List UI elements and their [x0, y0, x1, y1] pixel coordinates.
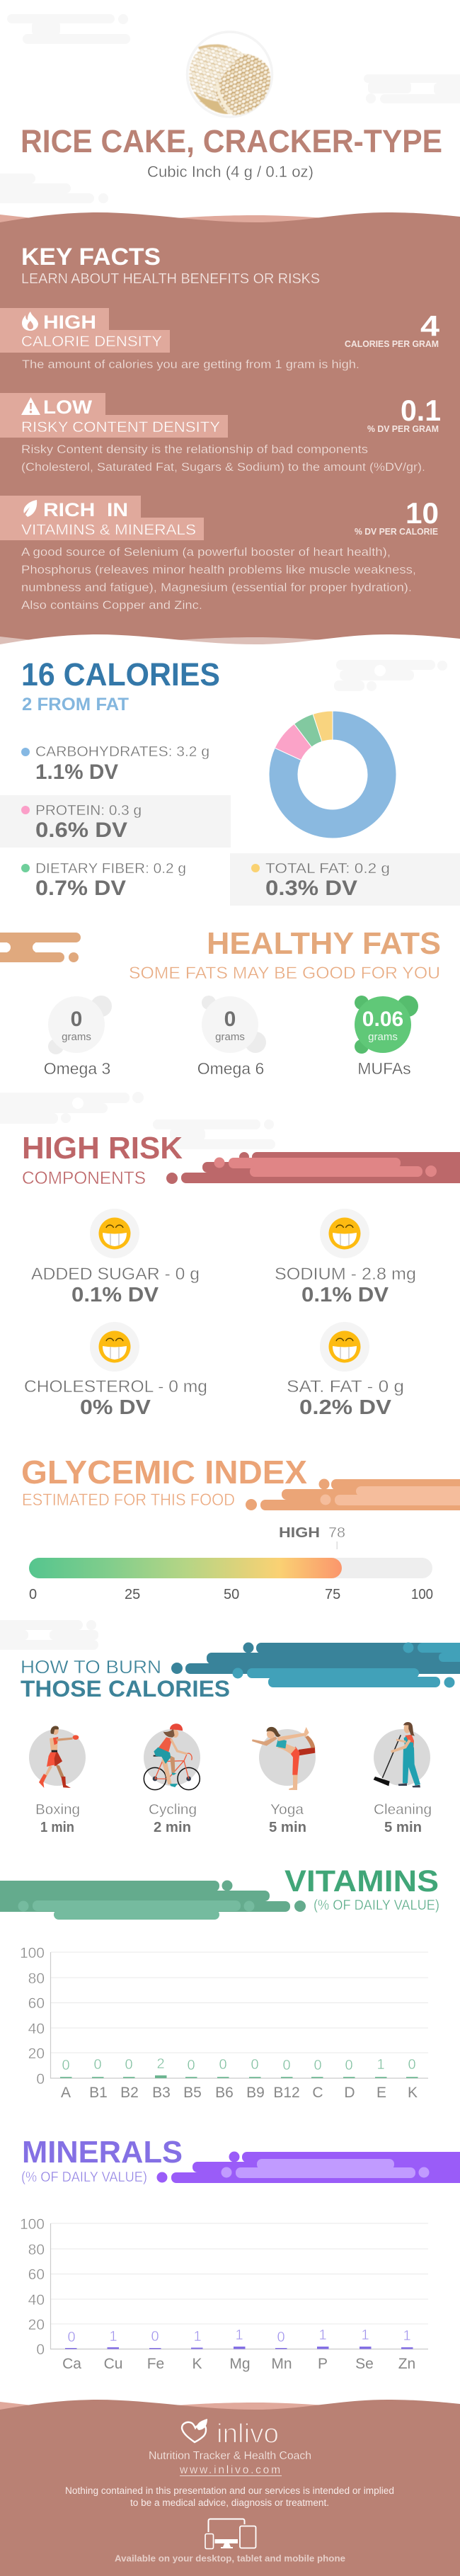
- website link: www.inlivo.com: [179, 2464, 280, 2476]
- omega 3: Omega 3: [44, 1059, 110, 1078]
- bar chart: vitamins: B6: [215, 2085, 234, 2101]
- bar chart: minerals: 0: [67, 2330, 76, 2345]
- marker label: high 78: HIGH: [279, 1525, 320, 1541]
- bar chart: vitamins: 1: [376, 2057, 385, 2073]
- bar chart: vitamins: 100: [20, 1945, 45, 1961]
- omega 3: grams: [62, 1031, 91, 1043]
- omega 6: Omega 6: [197, 1059, 264, 1078]
- subheading: percent daily value: (% OF DAILY VALUE): [314, 1898, 439, 1913]
- bar chart: minerals: P: [318, 2356, 328, 2372]
- mufas: MUFAs: [357, 1059, 411, 1078]
- bar chart: vitamins: B5: [183, 2085, 202, 2101]
- bar chart: vitamins: 20: [28, 2046, 45, 2062]
- gauge scale: 50: [224, 1587, 239, 1602]
- bar chart: vitamins: 0: [282, 2058, 291, 2073]
- icon: grinning face: [328, 1331, 361, 1362]
- fact: high calorie density: 4: [420, 309, 439, 342]
- activity: yoga: 5 min: [269, 1820, 306, 1835]
- background clouds: header: [0, 14, 460, 203]
- item: sodium: SODIUM - 2.8 mg: [275, 1265, 416, 1284]
- gauge bar: [29, 1558, 432, 1578]
- icon: warning triangle: [21, 397, 40, 415]
- omega 6: [197, 996, 266, 1078]
- activity: boxing: [29, 1726, 86, 1835]
- panel: high risk components: [0, 1092, 460, 1419]
- legend: total fat: 0.3% DV: [265, 877, 357, 900]
- subheading: key facts: LEARN ABOUT HEALTH BENEFITS OR RISKS: [21, 271, 320, 287]
- gauge scale: 0: [29, 1587, 37, 1602]
- fact: rich in vitamins and minerals: [0, 496, 439, 612]
- marker label: high 78: 78: [328, 1525, 345, 1541]
- bar chart: vitamins: C: [312, 2085, 323, 2101]
- bar chart: minerals: 1: [193, 2329, 202, 2344]
- bar chart: vitamins: 0: [345, 2058, 353, 2073]
- bar chart: vitamins: A: [61, 2085, 71, 2101]
- icon: yoga pose: [252, 1727, 315, 1790]
- bar chart: vitamins: B9: [246, 2085, 265, 2101]
- item: added sugar: 0.1% DV: [71, 1284, 159, 1306]
- bar chart: minerals: K: [192, 2356, 202, 2372]
- bar chart: minerals: 100: [20, 2216, 45, 2233]
- disclaimer: [65, 2485, 394, 2508]
- item: saturated fat: SAT. FAT - 0 g: [287, 1377, 404, 1396]
- omega 6: grams: [215, 1031, 245, 1043]
- icon: devices: [205, 2519, 256, 2549]
- subheading: percent daily value: (% OF DAILY VALUE): [21, 2170, 147, 2185]
- bar chart: vitamins: 0: [187, 2058, 195, 2073]
- mufas: 0.06: [362, 1008, 403, 1031]
- fact: rich in vitamins and minerals: % DV PER CALORIE: [355, 526, 438, 537]
- bar chart: minerals: Ca: [62, 2356, 81, 2372]
- item: saturated fat: [287, 1322, 404, 1419]
- bar chart: vitamins: B3: [152, 2085, 171, 2101]
- bar chart: vitamins: 0: [314, 2058, 322, 2073]
- decorative bars: vitamins: [0, 1881, 306, 1920]
- bar chart: minerals: 1: [361, 2327, 369, 2343]
- icon: person sweeping: [374, 1722, 420, 1787]
- bar chart: vitamins: K: [408, 2085, 418, 2101]
- decorative bars: high risk: [166, 1152, 460, 1184]
- bar chart: minerals: Mn: [271, 2356, 292, 2372]
- subheading: healthy fats: SOME FATS MAY BE GOOD FOR YOU: [129, 964, 440, 983]
- legend: total fat: TOTAL FAT: 0.2 g: [265, 861, 390, 877]
- heading: how to burn: HOW TO BURN: [21, 1656, 161, 1677]
- icon: grinning face: [328, 1218, 361, 1249]
- legend: protein: [0, 795, 231, 848]
- panel: healthy fats: [0, 926, 441, 1078]
- bar chart: minerals: Mg: [229, 2356, 251, 2372]
- activity: cycling: [144, 1723, 200, 1835]
- panel: key facts: [0, 212, 460, 659]
- mufas: grams: [368, 1031, 398, 1043]
- fact: rich in vitamins and minerals: A good source of Selenium (a powerful booster of heart health),: [21, 545, 391, 559]
- heading: key facts: KEY FACTS: [21, 244, 161, 270]
- item: cholesterol: 0% DV: [80, 1396, 151, 1419]
- bar chart: vitamins: 0: [219, 2057, 227, 2073]
- panel: glycemic index: [21, 1454, 460, 1602]
- bar chart: vitamins: 0: [93, 2057, 102, 2073]
- fact: high calorie density: [0, 308, 439, 371]
- fact: rich in vitamins and minerals: 10: [406, 496, 439, 530]
- fact: high calorie density: HIGH: [43, 312, 96, 333]
- bar chart: vitamins: E: [376, 2085, 386, 2101]
- fact: rich in vitamins and minerals: RICH IN: [43, 499, 128, 520]
- icon: boxer: [39, 1726, 79, 1788]
- bar chart: minerals: Fe: [147, 2356, 164, 2372]
- bar chart: vitamins: 0: [125, 2057, 133, 2073]
- bar chart: minerals: 0: [151, 2329, 159, 2344]
- decorative bars: glycemic index: [246, 1478, 460, 1510]
- bar chart: vitamins: D: [344, 2085, 355, 2101]
- availability note: Available on your desktop, tablet and mobile phone: [115, 2553, 345, 2563]
- fact: low risky content density: [0, 393, 441, 474]
- decorative bars: burn: [171, 1643, 460, 1688]
- bar chart: minerals: Se: [355, 2356, 374, 2372]
- fact: low risky content density: % DV PER GRAM: [367, 423, 439, 434]
- disclaimer: Nothing contained in this presentation and our services is intended or implied: [65, 2485, 394, 2496]
- icon: flame: [22, 312, 38, 331]
- fact: rich in vitamins and minerals: Also contains Copper and Zinc.: [21, 598, 202, 612]
- item: sodium: 0.1% DV: [301, 1284, 389, 1306]
- legend: dietary fiber: DIETARY FIBER: 0.2 g: [35, 861, 186, 877]
- bar chart: minerals: 60: [28, 2267, 45, 2283]
- fact: low risky content density: 0.1: [401, 394, 441, 427]
- activity: boxing: 1 min: [40, 1820, 74, 1835]
- item: cholesterol: CHOLESTEROL - 0 mg: [24, 1377, 207, 1396]
- bar chart: vitamins: B2: [120, 2085, 139, 2101]
- subtitle: serving size: Cubic Inch (4 g / 0.1 oz): [147, 163, 314, 181]
- activity: cleaning: Cleaning: [374, 1802, 432, 1818]
- legend: dietary fiber: 0.7% DV: [35, 877, 126, 900]
- background clouds: [0, 1092, 275, 1149]
- tagline: Nutrition Tracker & Health Coach: [149, 2450, 311, 2462]
- legend: total fat: [230, 853, 460, 906]
- bar chart: minerals: 1: [235, 2327, 243, 2343]
- panel: vitamins: [0, 1864, 439, 2101]
- bar chart: vitamins: [20, 1945, 428, 2101]
- bar chart: vitamins: 0: [62, 2058, 70, 2073]
- activity: cycling: 2 min: [154, 1820, 191, 1835]
- legend: carbohydrates: CARBOHYDRATES: 3.2 g: [35, 744, 209, 760]
- disclaimer: to be a medical advice, diagnosis or treatment.: [130, 2497, 329, 2508]
- legend: protein: PROTEIN: 0.3 g: [35, 803, 142, 819]
- decorative bars: minerals: [157, 2151, 460, 2183]
- decorative bars: healthy fats: [0, 933, 81, 962]
- omega 6: 0: [224, 1008, 236, 1031]
- gauge scale: 75: [325, 1587, 340, 1602]
- bar chart: minerals: 0: [277, 2330, 285, 2345]
- item: added sugar: ADDED SUGAR - 0 g: [31, 1265, 200, 1284]
- mufas: [355, 996, 418, 1078]
- fact: low risky content density: (Cholesterol, Saturated Fat, Sugars & Sodium) to the amount (%DV/gr).: [21, 460, 425, 474]
- legend: dietary fiber: [21, 861, 186, 900]
- bar chart: minerals: [20, 2216, 428, 2372]
- subheading: 2 from fat: 2 FROM FAT: [22, 695, 129, 714]
- fact: low risky content density: RISKY CONTENT DENSITY: [21, 419, 220, 435]
- bar chart: vitamins: 0: [36, 2071, 45, 2087]
- logo: inlivo: inlivo: [217, 2419, 279, 2449]
- fact: rich in vitamins and minerals: numbness and fatigue), Magnesium (essential for proper hydration).: [21, 581, 412, 594]
- heading: minerals: MINERALS: [22, 2135, 183, 2170]
- bar chart: minerals: 40: [28, 2292, 45, 2308]
- subheading: estimated: ESTIMATED FOR THIS FOOD: [22, 1491, 235, 1510]
- bar chart: minerals: Zn: [398, 2356, 415, 2372]
- gauge scale: [29, 1587, 433, 1602]
- item: saturated fat: 0.2% DV: [299, 1396, 392, 1419]
- marker label: high 78: [279, 1525, 345, 1549]
- activity: cleaning: [374, 1722, 432, 1835]
- activity: boxing: Boxing: [35, 1802, 80, 1818]
- logo: inlivo: [182, 2419, 279, 2449]
- title: RICE CAKE, CRACKER-TYPE: [21, 123, 442, 159]
- fact: high calorie density: CALORIES PER GRAM: [345, 338, 439, 349]
- bar chart: minerals: Cu: [104, 2356, 122, 2372]
- activity: yoga: [252, 1727, 316, 1835]
- bar chart: minerals: 20: [28, 2317, 45, 2333]
- omega 3: [44, 996, 112, 1078]
- bar chart: minerals: 0: [36, 2342, 45, 2358]
- fact: low risky content density: LOW: [43, 397, 93, 418]
- panel: footer: [0, 2400, 460, 2576]
- bar chart: vitamins: 80: [28, 1971, 45, 1987]
- omega 3: 0: [71, 1008, 82, 1031]
- legend: carbohydrates: 1.1% DV: [35, 760, 118, 784]
- icon: grinning face: [99, 1218, 130, 1249]
- legend: protein: 0.6% DV: [35, 819, 127, 842]
- bar chart: minerals: 1: [403, 2328, 411, 2344]
- activity: yoga: Yoga: [270, 1802, 304, 1818]
- icon: leaf: [23, 500, 37, 517]
- icon: cyclist: [144, 1723, 200, 1790]
- activity: cleaning: 5 min: [384, 1820, 422, 1835]
- bar chart: vitamins: 60: [28, 1995, 45, 2012]
- bar chart: minerals: 1: [318, 2327, 327, 2343]
- item: cholesterol: [24, 1322, 207, 1419]
- heading: high risk: HIGH RISK: [22, 1131, 183, 1166]
- panel: minerals: [20, 2135, 460, 2372]
- activity: cycling: Cycling: [149, 1802, 197, 1818]
- background cloud: [0, 1620, 98, 1650]
- subheading: components: COMPONENTS: [22, 1168, 146, 1188]
- background cloud: [334, 660, 447, 691]
- bar chart: vitamins: B1: [89, 2085, 108, 2101]
- fact: rich in vitamins and minerals: VITAMINS & MINERALS: [21, 522, 196, 538]
- bar chart: vitamins: 40: [28, 2021, 45, 2037]
- heading: glycemic index: GLYCEMIC INDEX: [21, 1454, 307, 1491]
- fact: high calorie density: CALORIE DENSITY: [21, 334, 162, 350]
- bar chart: minerals: 80: [28, 2242, 45, 2258]
- fact: rich in vitamins and minerals: Phosphorus (releaves minor health problems like muscle weakness,: [21, 563, 416, 576]
- food photo: rice cakes: [187, 32, 272, 117]
- fact: low risky content density: Risky Content density is the relationship of bad components: [21, 443, 368, 456]
- bar chart: vitamins: 0: [408, 2057, 416, 2073]
- heading: 16 calories: 16 CALORIES: [21, 656, 220, 693]
- bar chart: vitamins: 0: [251, 2057, 259, 2073]
- item: sodium: [275, 1209, 416, 1306]
- bar chart: vitamins: 2: [156, 2056, 165, 2072]
- bar chart: minerals: 1: [109, 2329, 117, 2344]
- item: added sugar: [31, 1209, 200, 1306]
- panel: calories: [0, 656, 460, 906]
- heading: healthy fats: HEALTHY FATS: [207, 926, 441, 961]
- heading: vitamins: VITAMINS: [284, 1864, 439, 1898]
- gauge scale: 100: [411, 1587, 433, 1602]
- legend: carbohydrates: [21, 744, 209, 784]
- donut chart: [269, 711, 396, 838]
- bar chart: vitamins: B12: [273, 2085, 300, 2101]
- panel: how to burn those calories: [0, 1620, 460, 1835]
- fact: high calorie density: The amount of calories you are getting from 1 gram is high.: [22, 358, 360, 371]
- heading: those calories: THOSE CALORIES: [21, 1676, 230, 1702]
- icon: grinning face: [99, 1331, 130, 1362]
- gauge scale: 25: [125, 1587, 140, 1602]
